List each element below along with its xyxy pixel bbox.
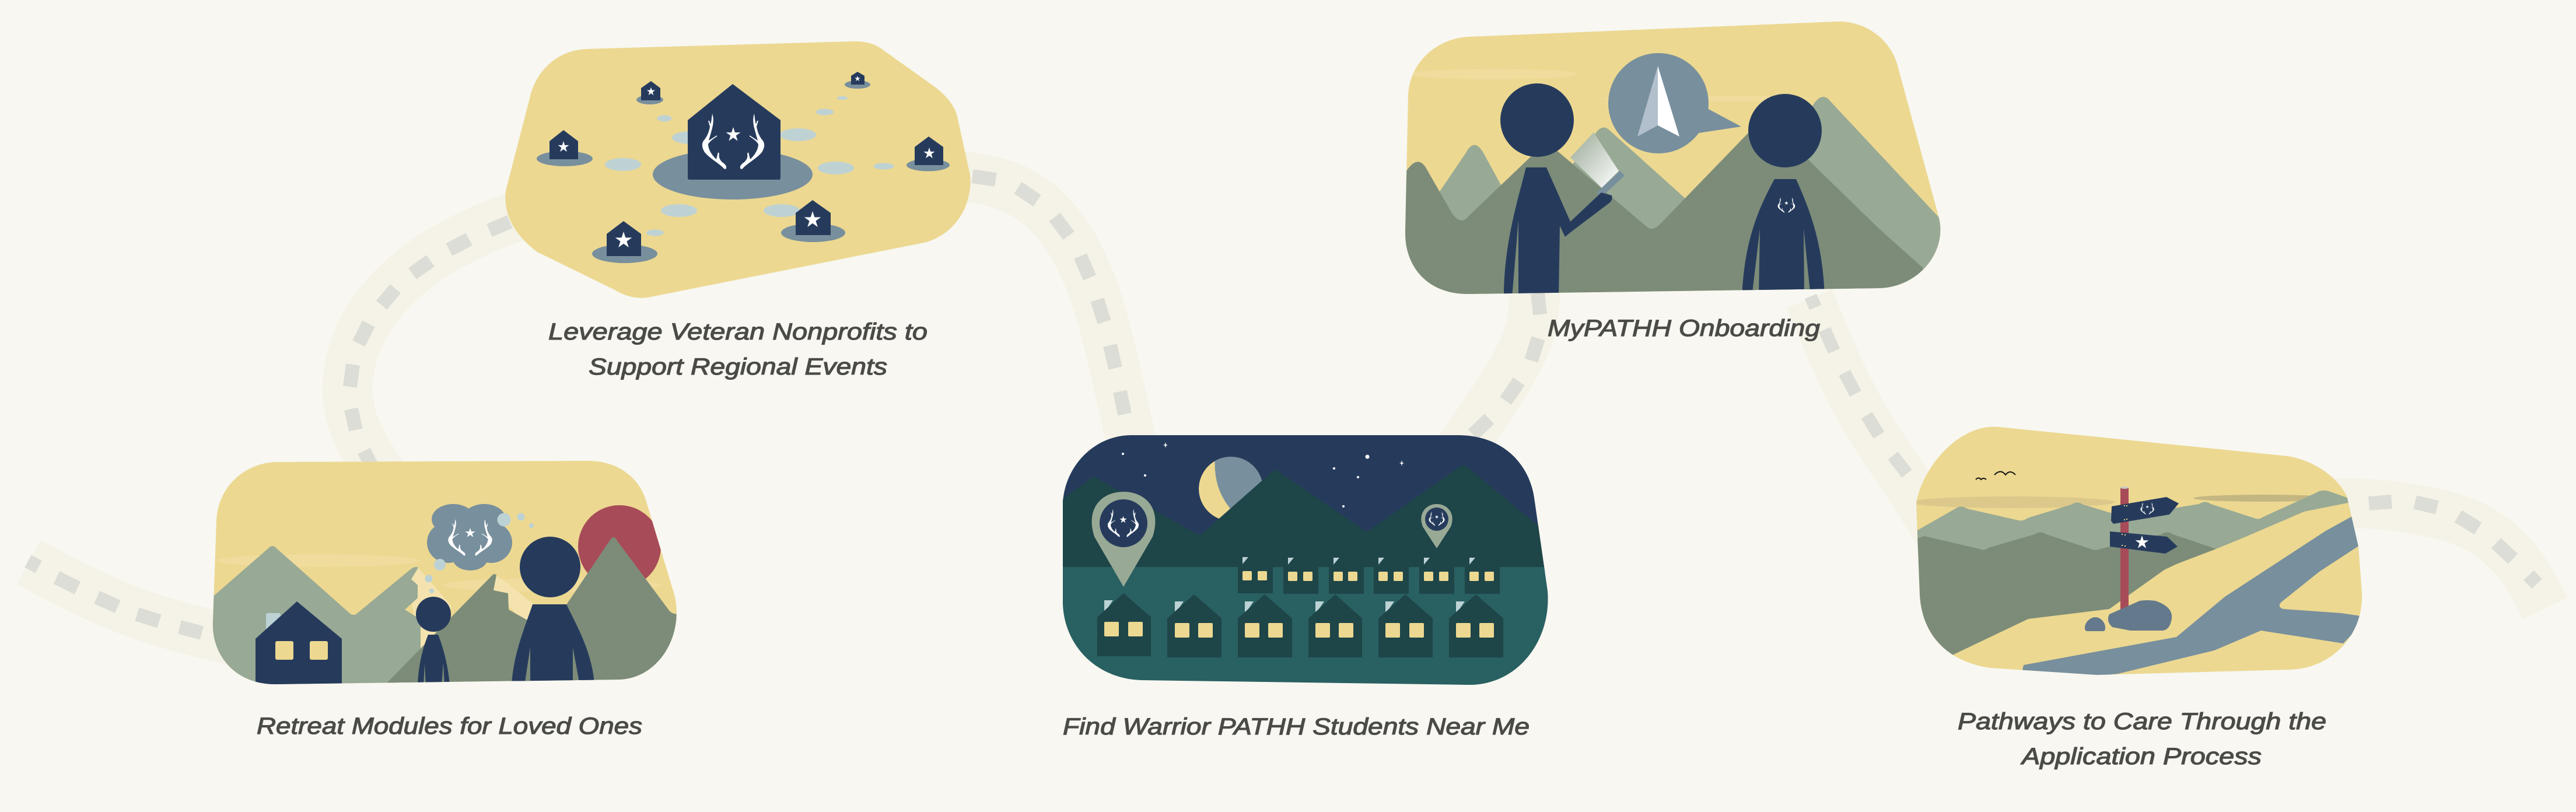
icon: large map pin: [1092, 492, 1155, 587]
label: leverage veteran nonprofits: Leverage Veteran Nonprofits to: [548, 319, 928, 345]
sky: [212, 461, 677, 684]
label: pathways to care: Pathways to Care Through the: [1958, 709, 2326, 734]
label: pathways to care: [1958, 709, 2326, 769]
label: pathways to care: Application Process: [2021, 744, 2262, 769]
icon: thought cloud with antlers: [425, 504, 534, 593]
stepping ovals: [605, 96, 894, 236]
night sky: [1056, 432, 1558, 572]
water: [1056, 567, 1558, 690]
front house row: [1097, 593, 1503, 657]
front mountains: [387, 537, 682, 688]
back mountains: [1435, 97, 1948, 298]
icon: main house with antlers: [653, 84, 813, 200]
icon: small house bottom right: [781, 200, 845, 242]
icon: rocks: [2085, 600, 2172, 631]
pale mountain faces: [411, 568, 534, 649]
back mountain: [210, 546, 421, 688]
label: retreat modules: Retreat Modules for Loved Ones: [257, 713, 642, 739]
icon: small map pin: [1421, 504, 1452, 548]
stars: [1122, 442, 1404, 508]
panel: pathways to care: [1908, 420, 2374, 682]
road segment: veteran nonprofits to find students: [933, 175, 1135, 455]
road segment: find students to onboarding: [1441, 268, 1540, 478]
icon: small house left: [537, 130, 593, 166]
label: find warrior pathh students: Find Warrior PATHH Students Near Me: [1063, 714, 1530, 740]
river: [2022, 513, 2368, 677]
icon: small house bottom left: [592, 221, 657, 263]
road segment: retreat modules to veteran nonprofits: [348, 207, 542, 484]
road segment: pathways to end: [2304, 502, 2545, 608]
haze: [216, 554, 662, 592]
road segment: start to retreat modules: [28, 561, 280, 649]
icon: signpost: [2110, 487, 2179, 613]
icon: small house right: [907, 136, 950, 172]
rear house row: [1238, 557, 1500, 594]
figure: person with tablet: [1500, 83, 1612, 298]
panel: leverage veteran nonprofits: [505, 41, 970, 298]
panel: find warrior pathh students: [1056, 432, 1558, 690]
haze: [1409, 69, 1810, 102]
label: mypathh onboarding: MyPATHH Onboarding: [1548, 316, 1820, 341]
label: leverage veteran nonprofits: Support Regional Events: [589, 354, 887, 380]
icon: chimney: [266, 613, 281, 629]
icon: birds: [1976, 471, 2015, 480]
icon: red sun: [578, 505, 661, 579]
figure: person with logo shirt: [1742, 94, 1825, 298]
icon: small house top left: [636, 81, 663, 104]
panel background: [505, 41, 970, 298]
label: leverage veteran nonprofits: [548, 319, 928, 380]
icon: house: [256, 601, 342, 688]
sky: [1908, 420, 2374, 682]
haze bands: [1910, 495, 2333, 508]
icon: tablet: [1570, 132, 1625, 197]
icon: speech bubble with compass arrow: [1608, 53, 1741, 153]
front mountains: [1917, 532, 2216, 655]
figure: adult: [512, 537, 594, 685]
mountains: [1059, 466, 1552, 572]
icon: moon: [1199, 457, 1262, 519]
figure: child: [416, 597, 451, 685]
back mountains: [1913, 491, 2357, 554]
sky: [1400, 18, 1948, 303]
panel: mypathh onboarding: [1400, 18, 1948, 309]
road: winding path with dashes: [28, 175, 2545, 649]
road segment: onboarding to pathways: [1810, 296, 1943, 540]
front mountains: [1405, 133, 1924, 294]
icon: small house top right: [845, 72, 870, 89]
panel: retreat modules for loved ones: [212, 461, 677, 684]
